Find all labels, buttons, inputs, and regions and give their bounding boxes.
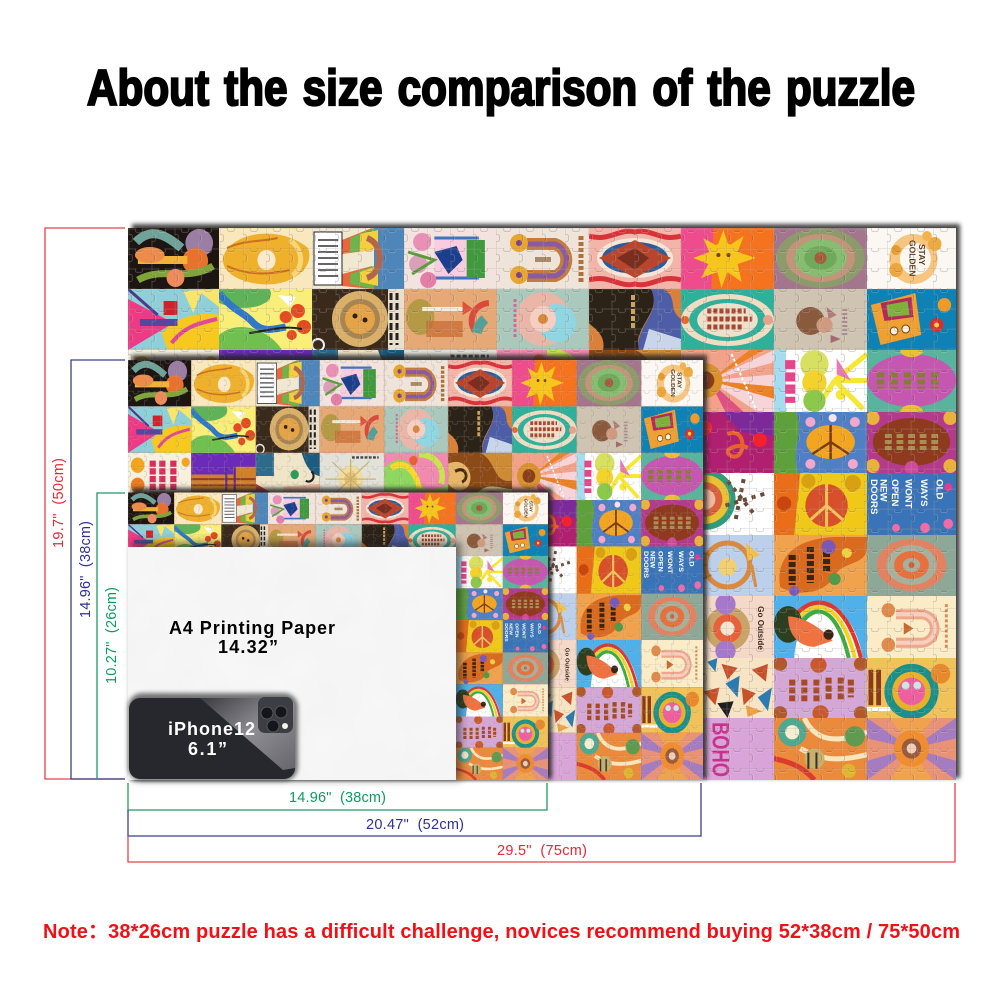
iPhone label: 6.1” <box>188 739 227 759</box>
puzzle: large 75x50cm <box>128 228 957 780</box>
row 7 tiles: Go Outside <box>756 606 765 650</box>
row 1 tiles: STAY <box>917 244 927 266</box>
iPhone label <box>168 719 255 759</box>
A4 paper sheet <box>128 547 456 780</box>
row 5 tiles <box>675 469 956 535</box>
dimension: height 26cm: 10.27" (26cm) <box>104 587 120 684</box>
iPhone label: iPhone12 <box>168 719 255 739</box>
row 5 tiles: NEW <box>879 479 889 502</box>
dimension: width 52cm: 20.47" (52cm) <box>366 817 464 833</box>
row 1 tiles: GOLDEN <box>908 240 917 276</box>
row 6 tiles <box>681 535 956 596</box>
row 8 tiles <box>681 657 956 721</box>
row 5 tiles: OLD <box>935 479 945 500</box>
row 5 tiles: DOORS <box>869 479 880 514</box>
dimension: width 75cm: 29.5" (75cm) <box>497 843 587 859</box>
dimension: width 38cm <box>128 783 547 810</box>
dimension: width 38cm: 14.96" (38cm) <box>289 790 386 806</box>
note: Note：38*26cm puzzle has a difficult challenge, novices recommend buying 52*38cm / 75*50cm <box>43 921 960 943</box>
row 3 tiles <box>128 350 956 412</box>
row 4 tiles <box>681 411 957 475</box>
row 5 tiles: OPEN <box>890 479 901 507</box>
row 1 tiles <box>128 228 956 289</box>
shadow: large puzzle <box>132 224 960 778</box>
row 5 tiles: WAYS <box>919 479 930 507</box>
puzzle: medium 52x38cm <box>128 360 704 780</box>
dimension: height 26cm <box>97 493 125 779</box>
row 7 tiles <box>681 594 956 661</box>
A4 paper label: 14.32” <box>218 637 278 657</box>
shadow: A4 paper <box>132 542 461 780</box>
row 2 tiles <box>128 289 956 351</box>
dimension: height 38cm <box>71 360 125 779</box>
iPhone 12 <box>128 693 298 781</box>
dimension: width 75cm <box>128 783 955 862</box>
shadow: medium puzzle <box>132 355 707 779</box>
dimension: height 38cm: 14.96" (38cm) <box>78 521 94 618</box>
shadow: small puzzle <box>132 488 552 779</box>
dimension: height 50cm: 19.7" (50cm) <box>51 458 67 548</box>
dimension: width 52cm <box>128 783 701 836</box>
dimension: height 50cm <box>45 228 125 779</box>
puzzle: small 38x26cm <box>128 492 548 780</box>
A4 paper label: A4 Printing Paper <box>169 618 335 638</box>
row 9 tiles <box>681 718 956 780</box>
A4 paper label <box>169 618 335 657</box>
row 5 tiles: WONT <box>904 479 914 509</box>
